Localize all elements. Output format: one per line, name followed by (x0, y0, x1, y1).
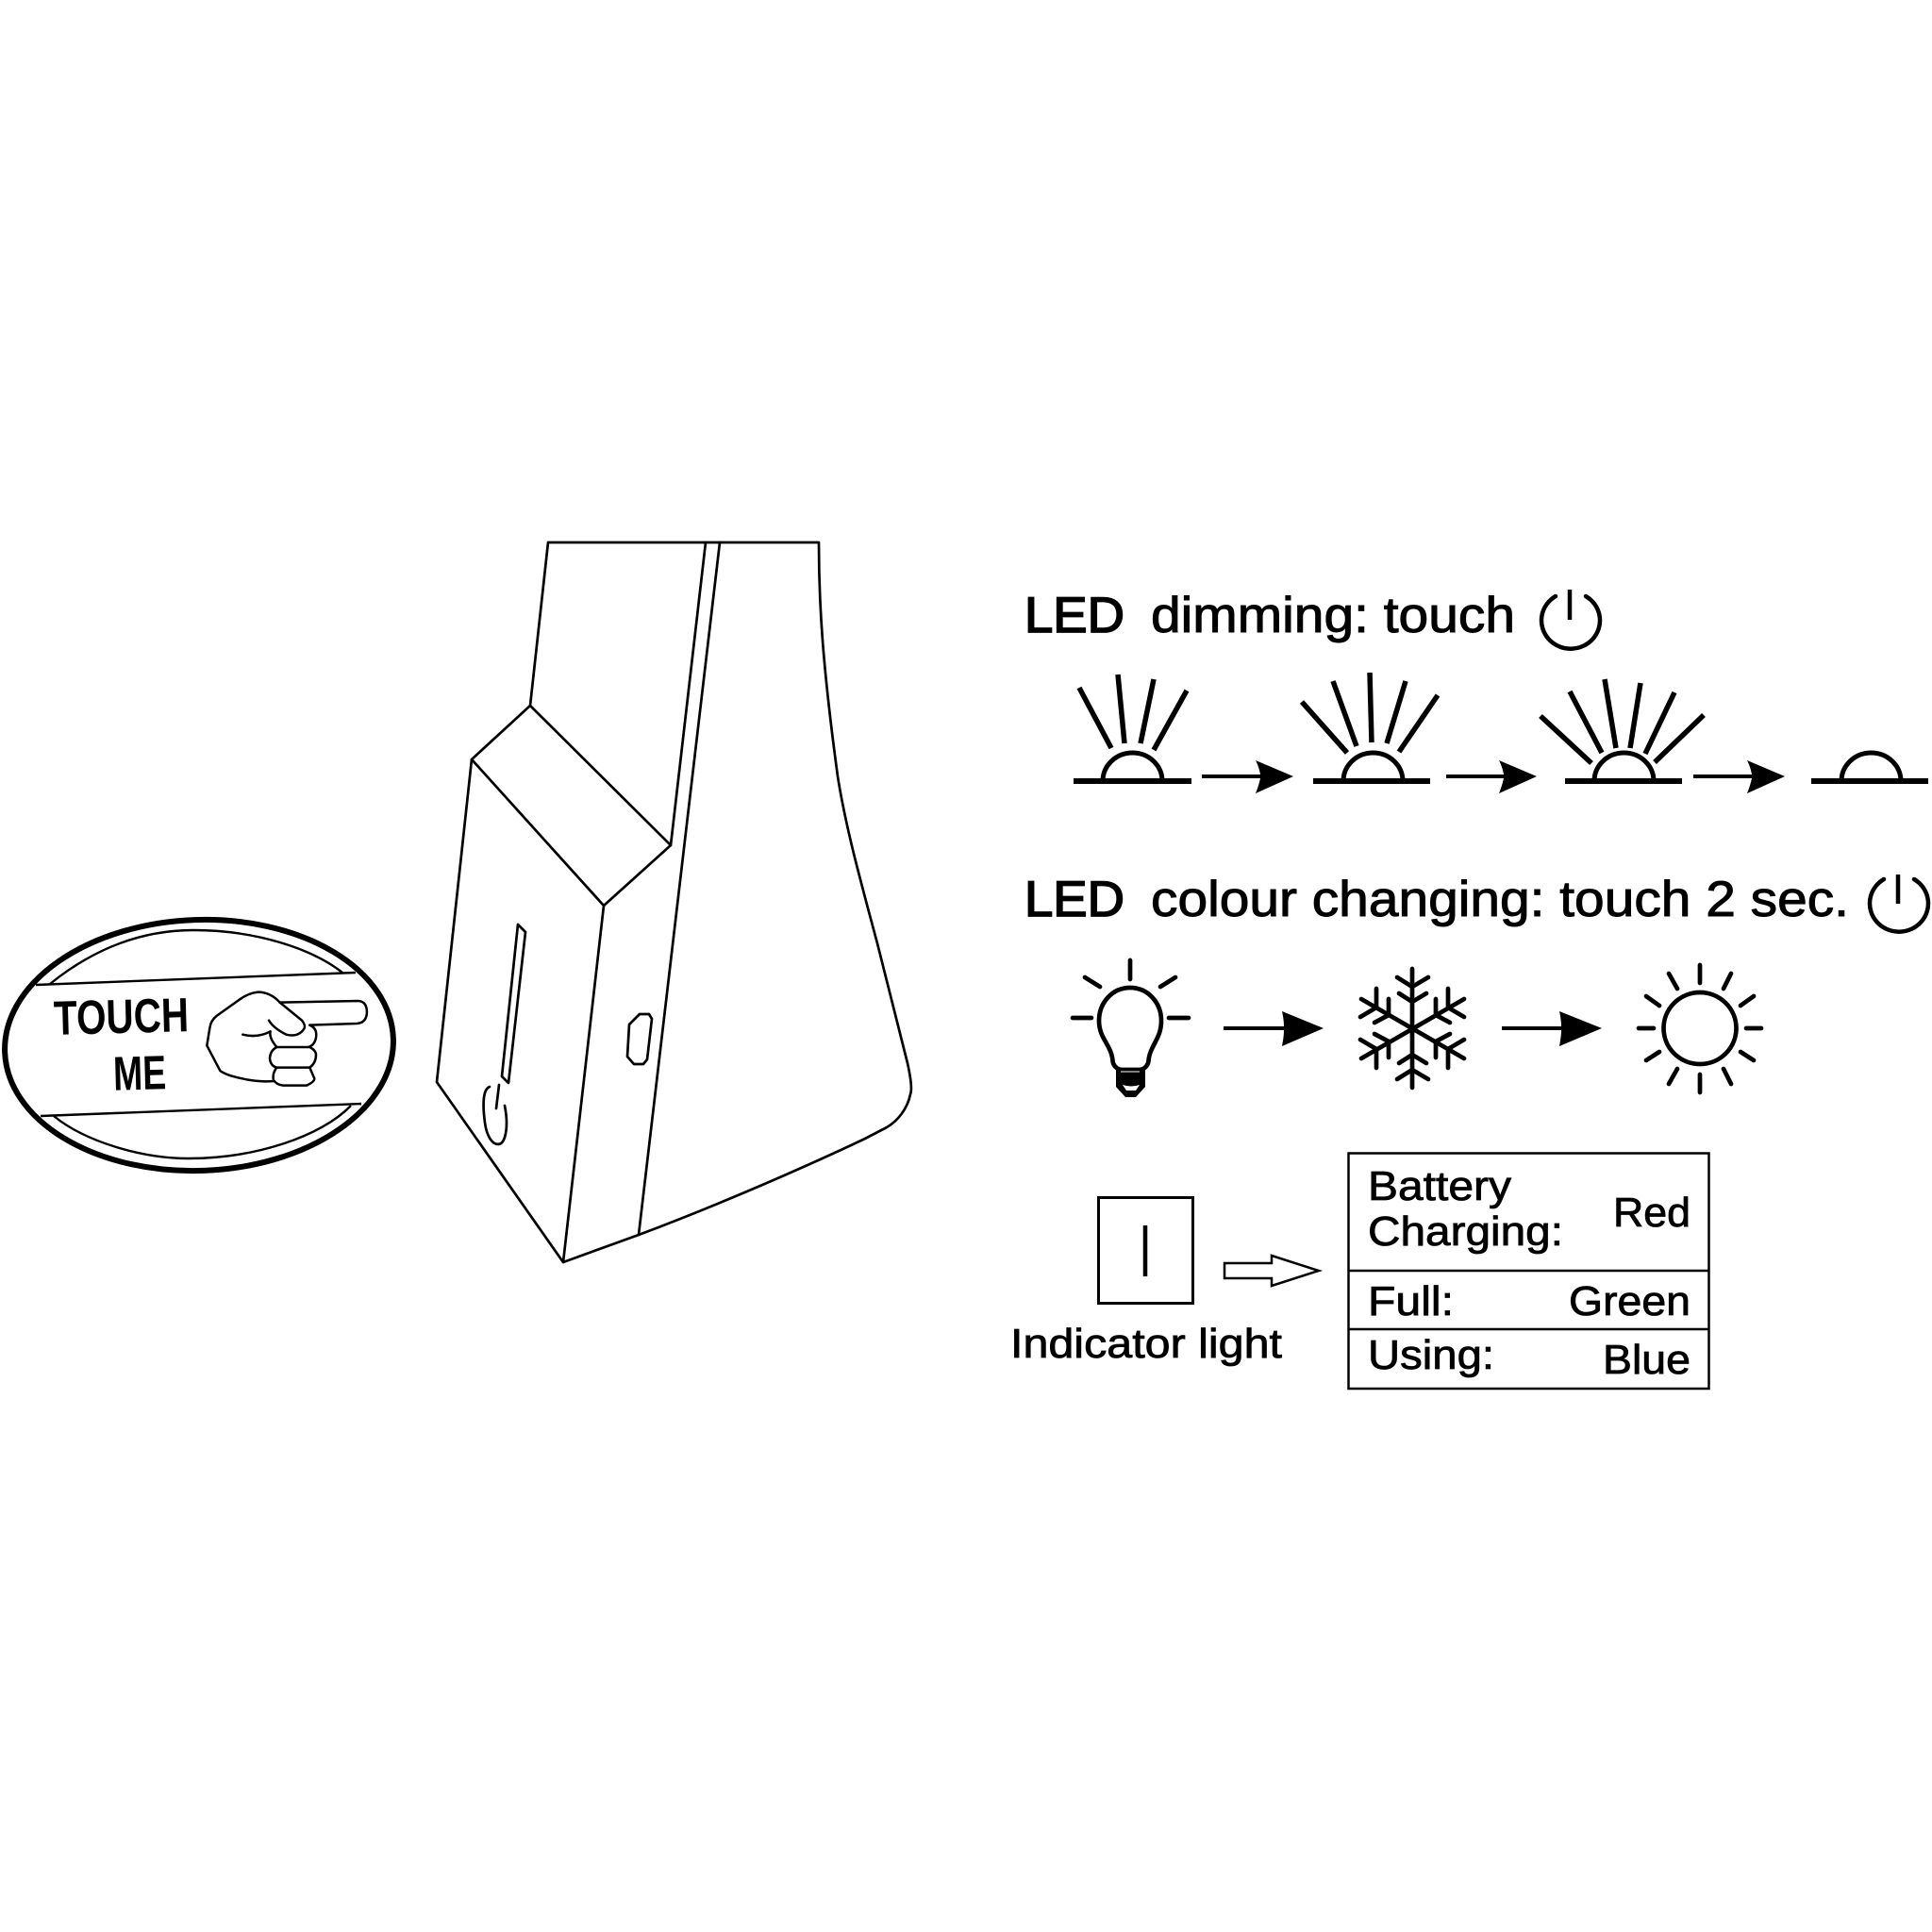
oval outline (0, 913, 398, 1177)
icon: LED level 2 (1302, 673, 1438, 781)
using row: Using: (1368, 1332, 1494, 1378)
table: indicator states (1348, 1153, 1709, 1389)
icon: power symbol 2 (1870, 874, 1928, 932)
panel: indicator light (1010, 1198, 1319, 1367)
full row (1368, 1278, 1690, 1324)
touch power symbol on lamp (484, 1085, 507, 1144)
row: colour changing steps (1073, 960, 1761, 1097)
icon: LED level 1 (1074, 675, 1191, 781)
panel: touch me oval badge (0, 913, 398, 1177)
heading: LED colour changing: LED (1024, 872, 1124, 927)
inner oval arcs and band (36, 930, 361, 1158)
icon: power symbol 1 (1541, 590, 1600, 649)
icon: pointing hand (207, 992, 367, 1086)
heading: LED colour changing: colour changing: touch 2 sec. (1151, 872, 1849, 927)
table frame (1348, 1153, 1709, 1389)
battery charging row: Battery (1368, 1163, 1511, 1209)
icon: snowflake (1360, 969, 1464, 1088)
touch me label (53, 988, 190, 1101)
charging slot (502, 924, 525, 1083)
using row (1368, 1332, 1690, 1383)
indicator box (1098, 1198, 1192, 1304)
arrow: outline (1224, 1256, 1319, 1286)
arrow (1446, 760, 1537, 793)
full row: Full: (1368, 1278, 1454, 1324)
panel: lamp line drawing (437, 542, 911, 1262)
icon: LED level 3 (1541, 679, 1704, 781)
battery charging row: Red (1613, 1190, 1690, 1236)
heading: LED dimming: LED (1024, 588, 1124, 643)
arrow (1202, 760, 1293, 793)
battery charging row (1368, 1163, 1690, 1255)
battery charging row: Charging: (1368, 1208, 1563, 1255)
icon: LED off (1811, 753, 1928, 781)
arrow (1502, 1011, 1602, 1046)
touch me label: ME (112, 1045, 167, 1101)
row: dimming steps (1074, 673, 1928, 793)
touch me label: TOUCH (53, 988, 190, 1045)
lamp outer body (437, 542, 911, 1262)
arrow (1224, 1011, 1324, 1046)
usb port (627, 1014, 652, 1064)
using row: Blue (1603, 1337, 1690, 1383)
full row: Green (1569, 1278, 1690, 1324)
arrow (1693, 760, 1785, 793)
lamp front edges (563, 542, 720, 1262)
icon: warm light bulb (1073, 960, 1189, 1097)
icon: sun (1639, 965, 1761, 1092)
heading: LED dimming (1024, 588, 1515, 643)
heading: LED dimming: dimming: touch (1151, 588, 1515, 643)
indicator label: Indicator light (1010, 1321, 1282, 1367)
lamp head wedge (472, 706, 671, 906)
